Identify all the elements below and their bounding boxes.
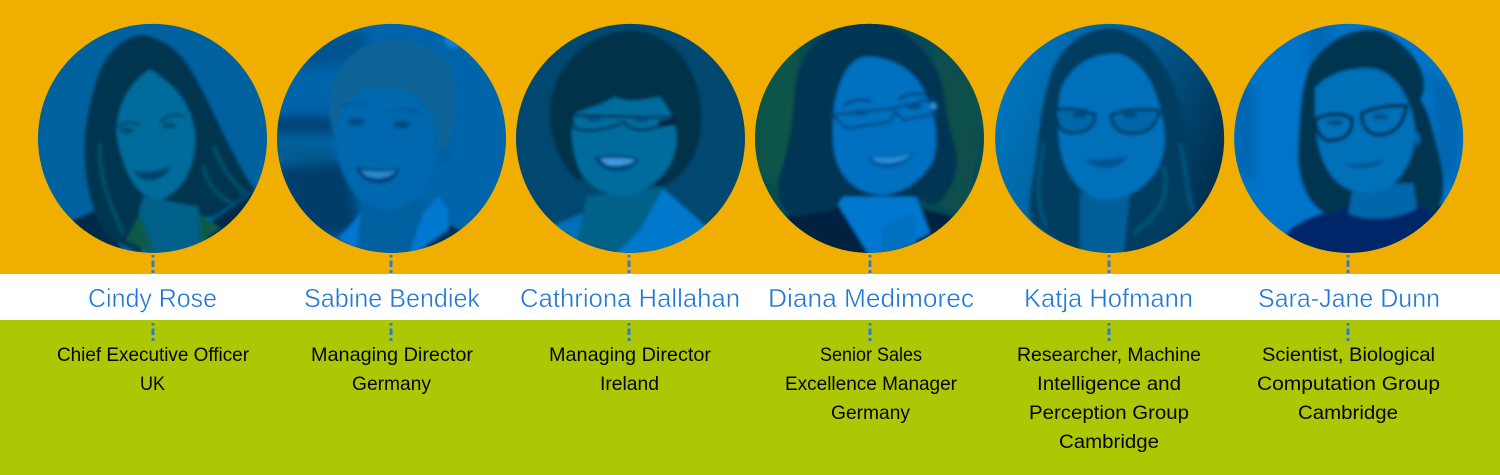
connector: Katja Hofmann bottom	[1108, 323, 1110, 343]
role: Cathriona Hallahan	[549, 344, 712, 395]
role: Sabine Bendiek: Germany	[352, 373, 431, 395]
portrait: Sara-Jane Dunn	[1230, 20, 1467, 257]
role: Diana Medimorec: Senior Sales	[820, 344, 922, 366]
portrait: Cathriona Hallahan	[513, 20, 750, 257]
name: Diana Medimorec: Diana Medimorec	[768, 283, 974, 313]
role: Cindy Rose: UK	[140, 373, 165, 395]
role: Sara-Jane Dunn: Scientist, Biological	[1262, 344, 1435, 366]
portrait: Sabine Bendiek	[273, 20, 513, 257]
connector: Cindy Rose top	[152, 255, 154, 273]
connector: Sara-Jane Dunn bottom	[1346, 323, 1350, 343]
portrait: Cindy Rose	[33, 20, 273, 257]
role: Katja Hofmann: Perception Group	[1029, 402, 1189, 424]
role: Katja Hofmann: Researcher, Machine	[1017, 344, 1201, 366]
connector: Diana Medimorec top	[868, 255, 872, 273]
role: Cindy Rose: Chief Executive Officer	[57, 344, 249, 366]
role: Cathriona Hallahan: Managing Director	[549, 344, 712, 366]
connector: Cindy Rose bottom	[152, 323, 154, 343]
connector: Cathriona Hallahan bottom	[628, 323, 630, 343]
role: Sara-Jane Dunn: Computation Group	[1257, 373, 1440, 395]
orange band	[0, 0, 1500, 274]
role: Diana Medimorec: Excellence Manager	[785, 373, 957, 395]
role: Diana Medimorec	[785, 344, 957, 424]
name: Cathriona Hallahan: Cathriona Hallahan	[520, 283, 740, 313]
connector: Sabine Bendiek top	[390, 255, 392, 273]
connector: Cathriona Hallahan top	[628, 255, 630, 273]
role: Sabine Bendiek: Managing Director	[311, 344, 474, 366]
connector: Katja Hofmann top	[1108, 255, 1110, 273]
green role band	[0, 320, 1500, 475]
connector: Sabine Bendiek bottom	[390, 323, 392, 343]
name: Katja Hofmann: Katja Hofmann	[1024, 283, 1193, 313]
connector: Sara-Jane Dunn top	[1346, 255, 1350, 273]
role: Sara-Jane Dunn: Cambridge	[1298, 402, 1398, 424]
role: Diana Medimorec: Germany	[831, 402, 910, 424]
role: Katja Hofmann: Intelligence and	[1037, 373, 1181, 395]
portrait: Diana Medimorec	[753, 20, 987, 257]
connector: Diana Medimorec bottom	[868, 323, 872, 343]
white name band	[0, 274, 1500, 320]
role: Katja Hofmann	[1017, 344, 1201, 453]
role: Cindy Rose	[57, 344, 249, 395]
role: Sara-Jane Dunn	[1257, 344, 1440, 424]
role: Katja Hofmann: Cambridge	[1059, 431, 1159, 453]
name: Sabine Bendiek: Sabine Bendiek	[304, 283, 481, 313]
role: Cathriona Hallahan: Ireland	[600, 373, 659, 395]
name: Sara-Jane Dunn: Sara-Jane Dunn	[1258, 283, 1440, 313]
name: Cindy Rose: Cindy Rose	[88, 283, 217, 313]
role: Sabine Bendiek	[311, 344, 474, 395]
portrait: Katja Hofmann	[993, 20, 1227, 257]
